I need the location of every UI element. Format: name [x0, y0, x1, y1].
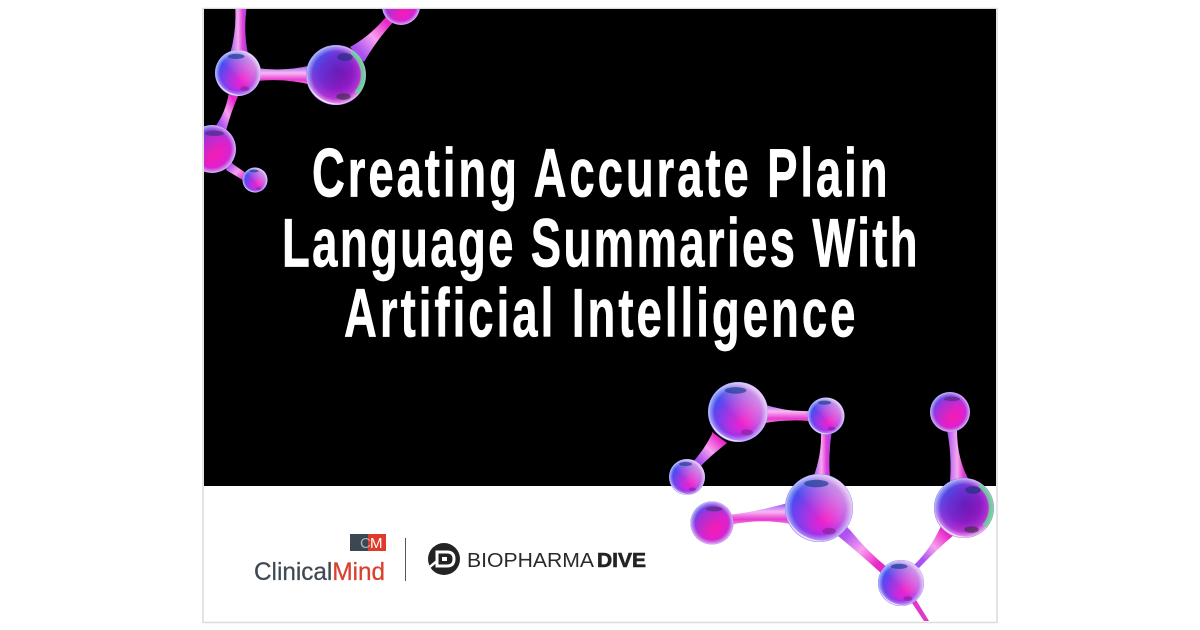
- logo: Biopharma Dive: BIOPHARMA: [467, 549, 594, 572]
- logo: ClinicalMind: M: [370, 535, 382, 552]
- divider between logos: [405, 538, 406, 581]
- logo: Biopharma Dive: [426, 541, 646, 575]
- background frame: [203, 8, 997, 622]
- logo: ClinicalMind: [254, 534, 386, 586]
- title: [282, 135, 918, 352]
- title: Language Summaries With: [282, 205, 918, 282]
- molecule: bottom right: [669, 382, 994, 621]
- title: Artificial Intelligence: [344, 275, 856, 352]
- molecule: top left: [204, 9, 420, 192]
- title: Creating Accurate Plain: [312, 135, 888, 212]
- logo: Biopharma Dive: DIVE: [597, 549, 646, 572]
- black header panel: [204, 9, 996, 486]
- logo: ClinicalMind: C: [360, 535, 371, 552]
- logo: ClinicalMind: ClinicalMind: [254, 558, 385, 586]
